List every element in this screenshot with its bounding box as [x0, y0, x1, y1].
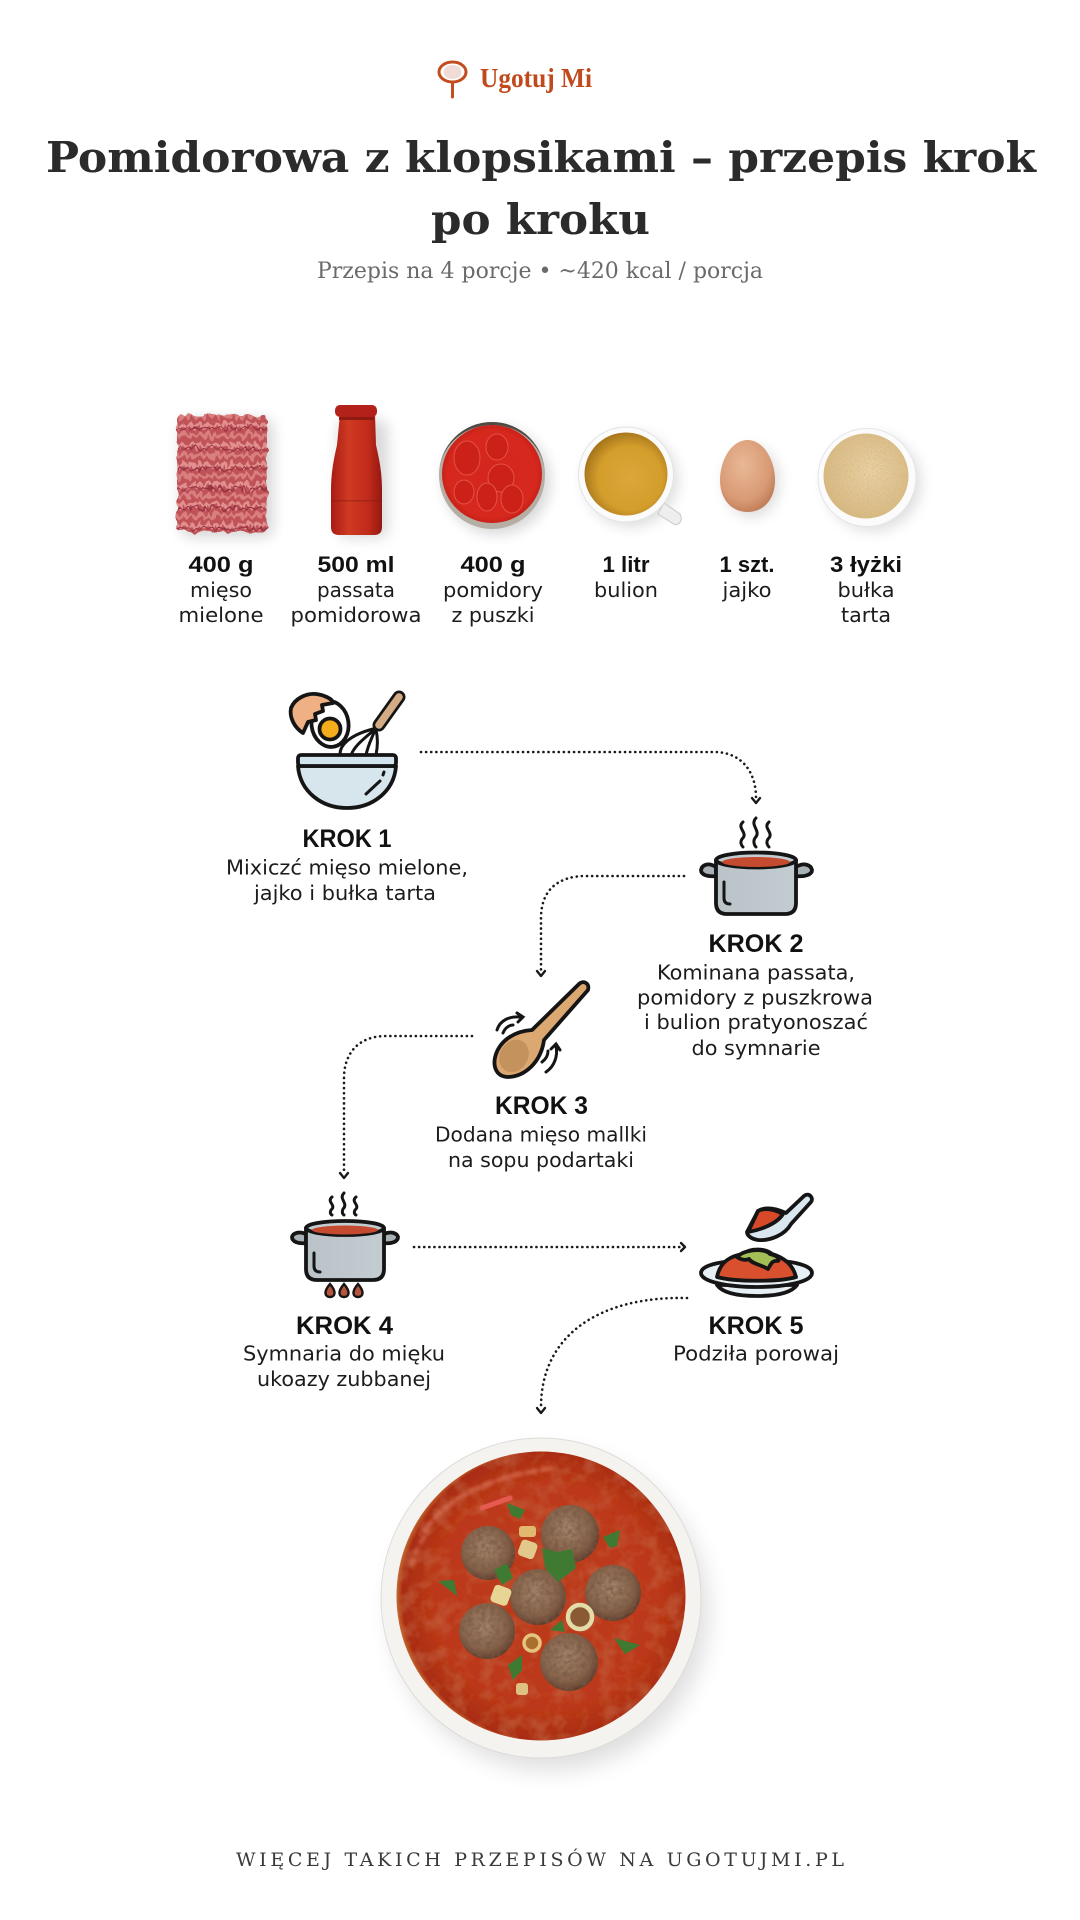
label: KROK 2: KROK 2 [708, 930, 804, 958]
ingredient: passata bottle: 500 ml [318, 552, 394, 577]
panel: ingredients [177, 405, 921, 627]
description step 2: do symnarie [692, 1036, 820, 1060]
step 4 [243, 1193, 445, 1391]
description step 2: Kominana passata, [657, 960, 855, 984]
ingredient: passata bottle: passata [317, 578, 395, 602]
ingredient: canned tomatoes: 400 g [460, 552, 526, 577]
logo: Ugotuj Mi [439, 62, 592, 97]
ingredient: breadcrumbs: bułka [838, 578, 894, 602]
step 2 [637, 818, 873, 1060]
icon: pot on flames [292, 1193, 398, 1297]
description step 2 [637, 960, 873, 1060]
title: Pomidorowa z klopsikami – przepis krok [46, 133, 1037, 182]
ingredient: egg [720, 440, 779, 602]
description step 1: jajko i bułka tarta [253, 881, 436, 905]
description step 3: Dodana mięso mallki [435, 1122, 647, 1146]
icon: wooden spoon [493, 982, 588, 1078]
ingredient: broth cup [578, 427, 681, 602]
description step 2: i bulion pratyonoszać [644, 1010, 868, 1034]
label: KROK 1: KROK 1 [302, 825, 392, 853]
title [46, 133, 1037, 244]
ingredient: egg: jajko [721, 578, 772, 602]
step 1 [226, 694, 468, 905]
ingredient: minced meat: mięso [190, 578, 252, 602]
ingredient: minced meat [177, 415, 273, 627]
herb leaves [438, 1503, 640, 1680]
description step 4: ukoazy zubbanej [257, 1367, 431, 1391]
ingredient: passata bottle [290, 405, 422, 627]
label: KROK 3: KROK 3 [495, 1092, 588, 1120]
ingredient: passata bottle: pomidorowa [290, 603, 422, 627]
description step 1 [226, 856, 468, 905]
ingredient: egg: 1 szt. [720, 552, 774, 577]
icon: spoon logo [439, 62, 466, 97]
arrow: step 3 to step 4 [340, 1036, 472, 1178]
nuts and onion rings [489, 1526, 592, 1695]
arrow: step 2 to step 3 [537, 876, 684, 976]
icon: egg and whisk over bowl [291, 694, 399, 808]
arrow: step 1 to step 2 [421, 752, 760, 803]
title: po kroku [431, 195, 650, 244]
arrow: step 5 to final dish [537, 1298, 687, 1413]
description step 4 [243, 1342, 445, 1391]
ingredient: breadcrumbs: 3 łyżki [830, 552, 902, 577]
ingredient: breadcrumbs [818, 428, 921, 627]
icon: ladle over plate [701, 1195, 812, 1296]
ingredient: minced meat: 400 g [188, 552, 254, 577]
ingredient: broth cup: 1 litr [602, 552, 650, 577]
logo wordmark: Ugotuj Mi [480, 63, 592, 93]
ingredient: minced meat: mielone [178, 603, 264, 627]
ingredient: breadcrumbs: tarta [841, 603, 891, 627]
final dish: soup with meatballs [381, 1438, 708, 1770]
label: KROK 5: KROK 5 [708, 1312, 804, 1340]
description step 5: Podziła porowaj [673, 1342, 839, 1366]
arrow: step 4 to step 5 [414, 1243, 685, 1251]
ingredient: canned tomatoes: z puszki [452, 603, 534, 627]
meatballs [459, 1505, 641, 1691]
description step 2: pomidory z puszkrowa [637, 986, 873, 1010]
ingredient: canned tomatoes: pomidory [443, 578, 543, 602]
step 5 [673, 1195, 839, 1366]
description step 3: na sopu podartaki [448, 1148, 634, 1172]
description step 1: Mixiczć mięso mielone, [226, 856, 468, 880]
description step 4: Symnaria do mięku [243, 1342, 445, 1366]
subtitle: Przepis na 4 porcje • ~420 kcal / porcja [317, 259, 763, 284]
ingredient: broth cup: bulion [594, 578, 658, 602]
description step 3 [435, 1122, 647, 1172]
step 3 [435, 982, 647, 1172]
ingredient: canned tomatoes [439, 422, 550, 627]
footer: WIĘCEJ TAKICH PRZEPISÓW NA UGOTUJMI.PL [236, 1848, 844, 1871]
icon: pot with steam [701, 818, 812, 914]
label: KROK 4: KROK 4 [296, 1312, 393, 1340]
